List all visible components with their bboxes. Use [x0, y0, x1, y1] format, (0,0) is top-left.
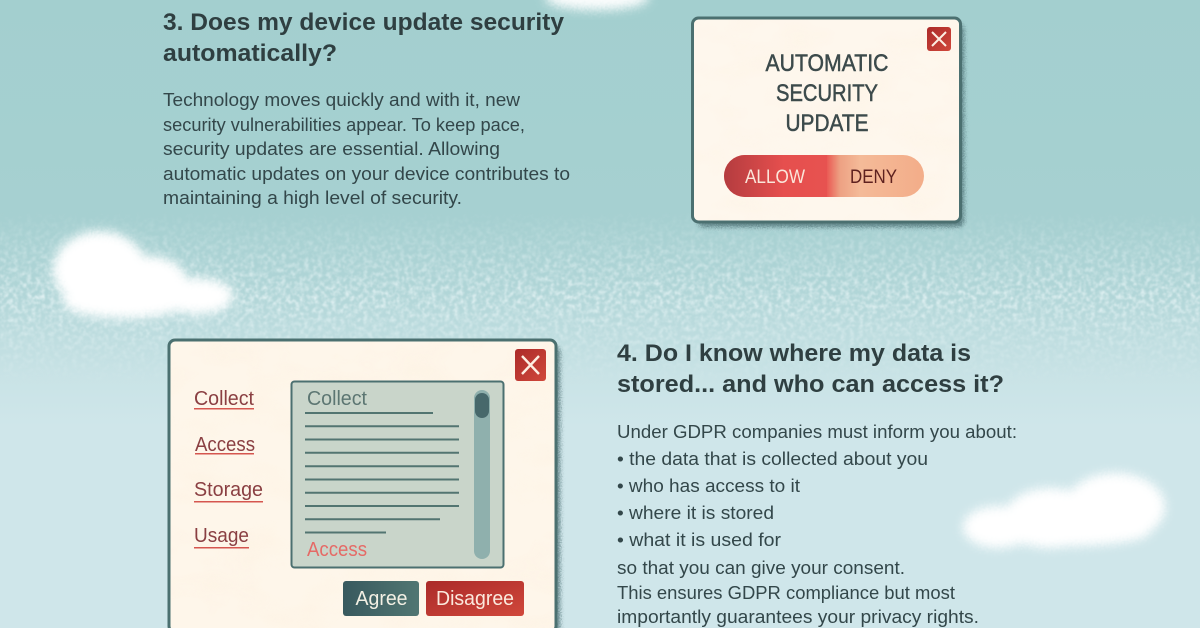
placeholder text lines [305, 413, 459, 532]
section 4 body text [617, 422, 1017, 627]
toggle: deny: DENY [850, 167, 897, 188]
dialog title [766, 50, 888, 137]
cloud: top centre [545, 0, 649, 10]
section 3 body text: security updates are essential. Allowing [163, 139, 500, 159]
cloud: right [963, 473, 1165, 548]
text panel [292, 382, 504, 568]
icon: close button [927, 27, 951, 51]
section 4 body text: This ensures GDPR compliance but most [617, 583, 955, 603]
button: agree [343, 581, 419, 616]
section 3 body text [163, 90, 570, 208]
section 4 heading [617, 340, 1004, 398]
cloud: left [53, 231, 233, 318]
dialog window [169, 340, 556, 628]
button: agree: Agree [356, 588, 408, 610]
toggle: allow: ALLOW [745, 167, 805, 188]
dialog: automatic security update [692, 18, 964, 227]
toggle: allow [724, 155, 820, 197]
button: disagree [426, 581, 524, 616]
section 4 body text: • the data that is collected about you [617, 449, 928, 469]
section 3 heading: 3. Does my device update security [163, 9, 565, 36]
link: storage: Storage [194, 479, 263, 501]
section 3 body text: automatic updates on your device contributes to [163, 164, 570, 184]
dialog title: SECURITY [776, 80, 878, 107]
panel heading: collect: Collect [307, 388, 367, 410]
section 3 body text: maintaining a high level of security. [163, 188, 462, 208]
section 4 body text: importantly guarantees your privacy rights. [617, 607, 979, 627]
scrollbar [474, 390, 490, 559]
panel heading: access: Access [307, 539, 367, 561]
section 4 heading: stored... and who can access it? [617, 371, 1004, 398]
section 3 body text: Technology moves quickly and with it, new [163, 90, 521, 110]
section 3 heading [163, 9, 565, 67]
section 4 body text: • where it is stored [617, 503, 774, 523]
link: usage: Usage [194, 525, 249, 547]
dialog title: UPDATE [786, 110, 868, 137]
button: disagree: Disagree [436, 588, 514, 610]
link: collect: Collect [194, 388, 254, 410]
section 4 body text: so that you can give your consent. [617, 558, 905, 578]
section 4 body text: • what it is used for [617, 530, 781, 550]
section 3 heading: automatically? [163, 40, 337, 67]
link: access: Access [195, 434, 255, 456]
paper texture [694, 19, 959, 221]
icon: close button [515, 349, 546, 381]
paper texture [170, 341, 555, 628]
dialog shadow [698, 24, 964, 227]
dialog: data consent [169, 340, 560, 628]
menu links [194, 388, 263, 548]
dialog window [692, 18, 960, 222]
toggle: deny [724, 155, 924, 197]
section 4 body text: Under GDPR companies must inform you about: [617, 422, 1017, 442]
dialog shadow [175, 346, 560, 628]
section 4 heading: 4. Do I know where my data is [617, 340, 971, 367]
grainy cloud band [0, 225, 1200, 361]
section 3 body text: security vulnerabilities appear. To keep pace, [163, 115, 525, 135]
dialog title: AUTOMATIC [766, 50, 888, 77]
section 4 body text: • who has access to it [617, 476, 800, 496]
